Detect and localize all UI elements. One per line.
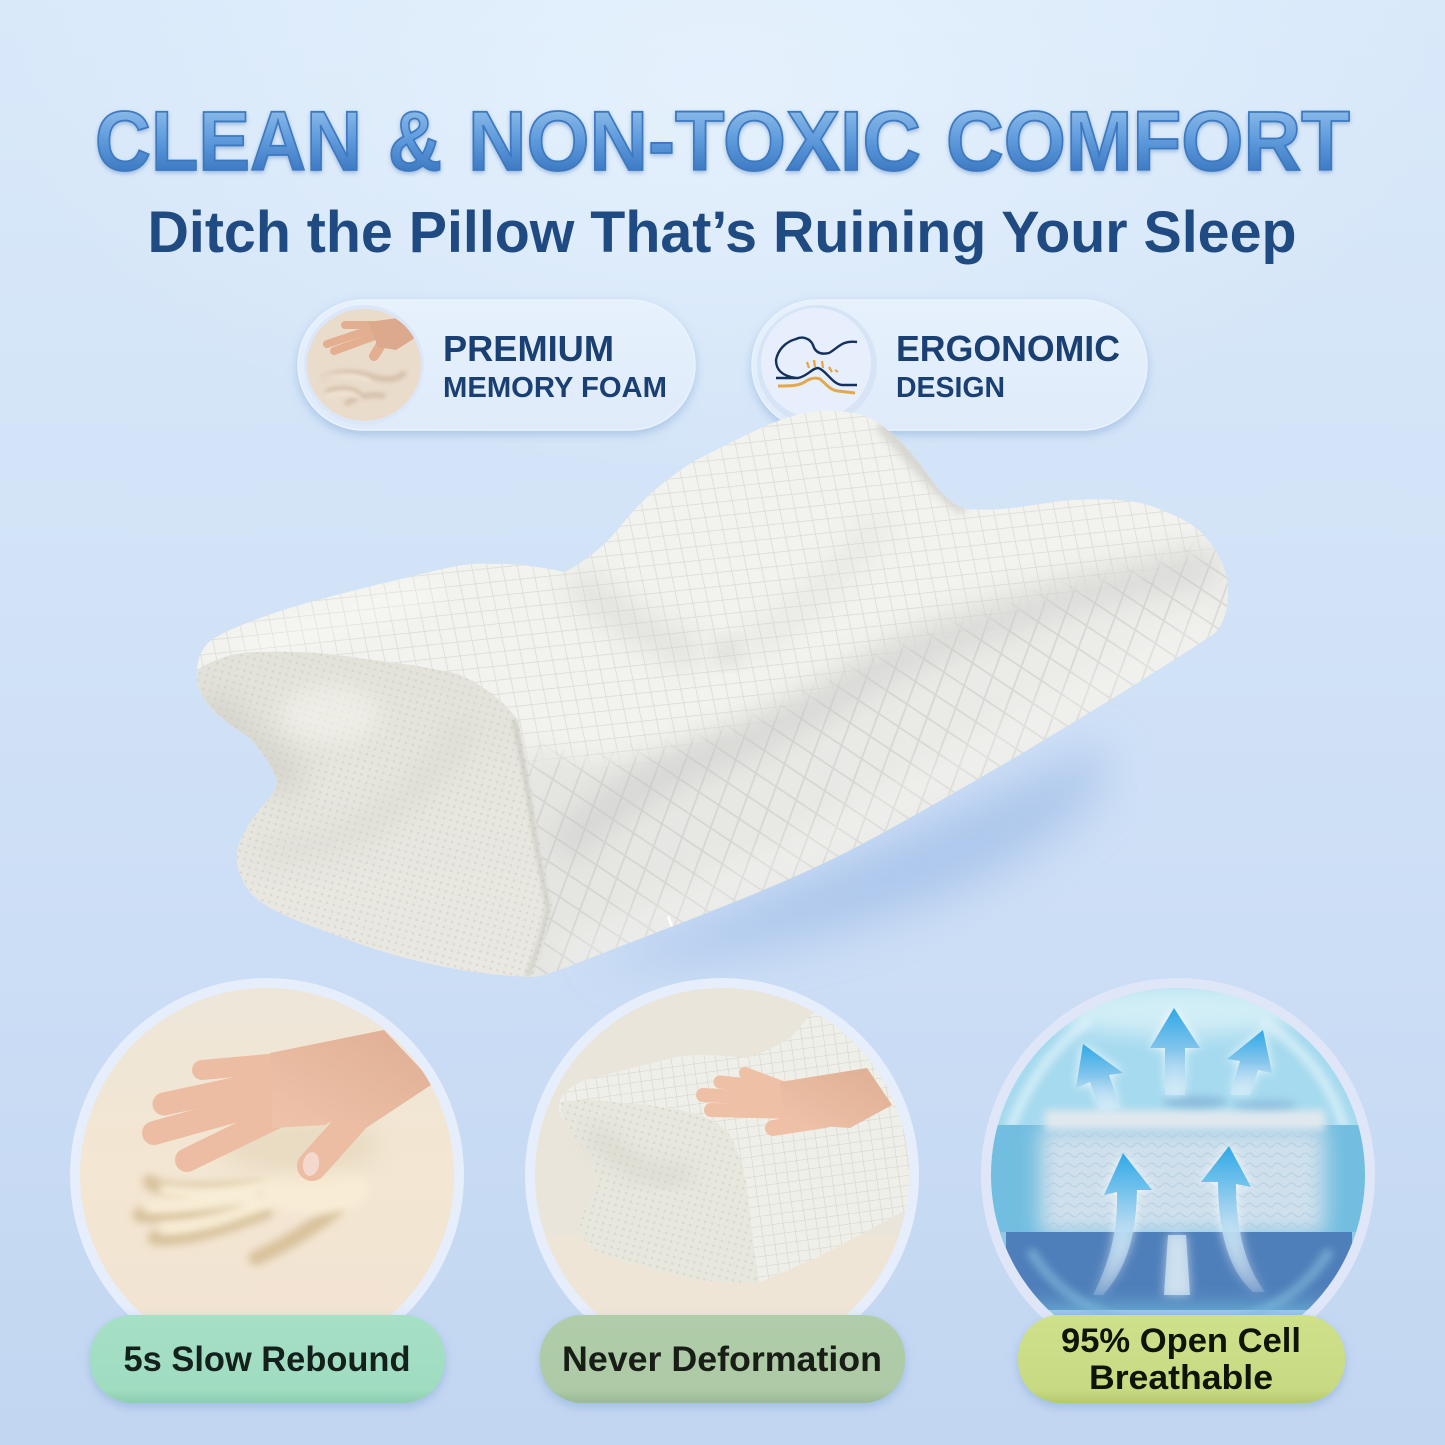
badge: premium memory foam: MEMORY FOAM bbox=[443, 372, 667, 404]
hand bbox=[703, 1068, 892, 1128]
badge: ergonomic design bbox=[752, 300, 1147, 430]
pillow shadow bbox=[590, 745, 1106, 962]
subtitle: Ditch the Pillow That’s Ruining Your Sleep bbox=[148, 200, 1296, 265]
title: CLEAN bbox=[95, 94, 362, 188]
label text: Breathable bbox=[1089, 1359, 1273, 1397]
label pill bbox=[1018, 1315, 1345, 1403]
icon: hand on foam bbox=[304, 305, 424, 425]
badge: ergonomic design: DESIGN bbox=[896, 372, 1005, 404]
title: NON-TOXIC bbox=[468, 94, 921, 188]
pillow top surface bbox=[190, 405, 1240, 985]
circle: airflow through open-cell foam bbox=[981, 978, 1375, 1318]
main pillow bbox=[190, 405, 1260, 1000]
zipper tab bbox=[667, 916, 673, 927]
airflow arrows bbox=[1076, 1008, 1272, 1295]
pillow side face bbox=[526, 541, 1228, 977]
title bbox=[95, 94, 1350, 188]
icon: head and neck curve bbox=[757, 305, 877, 425]
label text: Never Deformation bbox=[562, 1340, 882, 1379]
photo circle: hand on foam bbox=[70, 978, 464, 1316]
label text: 5s Slow Rebound bbox=[124, 1340, 410, 1379]
photo circle: hand on pillow bbox=[525, 978, 919, 1315]
badge text: ERGONOMIC bbox=[896, 328, 1120, 369]
hand print in foam bbox=[140, 1166, 370, 1258]
title: & bbox=[388, 94, 442, 188]
badge: premium memory foam bbox=[298, 300, 695, 430]
hand bbox=[154, 1030, 434, 1177]
feature: breathable bbox=[980, 978, 1380, 1403]
feature: never deformation bbox=[525, 978, 925, 1403]
badge text: PREMIUM bbox=[443, 328, 614, 369]
small pillow bbox=[559, 1012, 925, 1283]
label pill bbox=[90, 1315, 445, 1403]
label text: 95% Open Cell bbox=[1061, 1322, 1301, 1360]
label pill bbox=[540, 1315, 905, 1403]
label text bbox=[1061, 1322, 1301, 1397]
feature: slow rebound bbox=[70, 978, 470, 1403]
title: COMFORT bbox=[946, 94, 1350, 188]
pillow end face bbox=[190, 652, 552, 982]
